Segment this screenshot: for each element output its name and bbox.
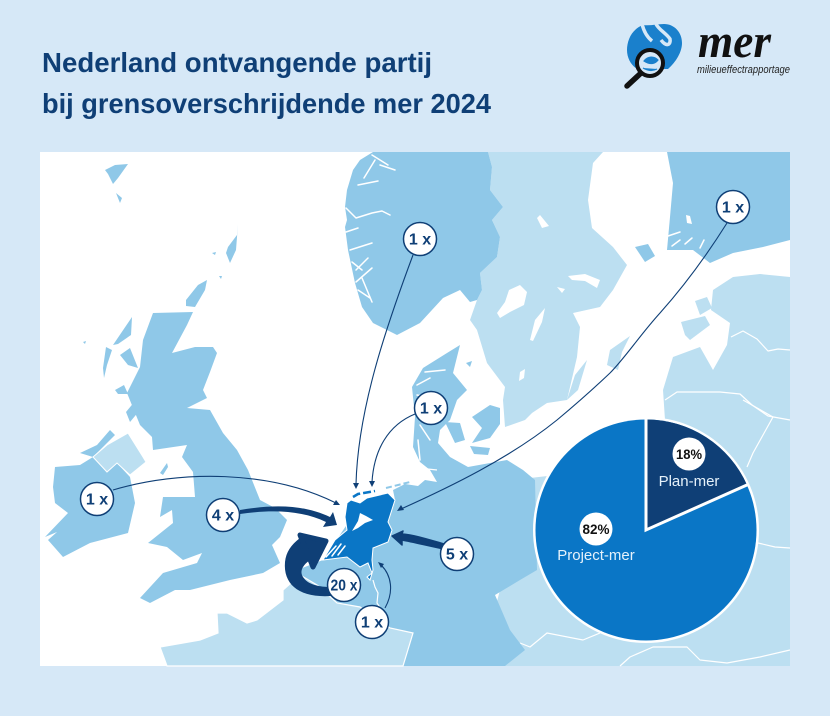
badge: France 1 x: 1 x: [361, 614, 383, 632]
map: Netherlands: [323, 482, 410, 580]
arrow: Belgium to Netherlands: [285, 535, 331, 596]
pie chart: plan-mer and project-mer share: [533, 417, 759, 643]
logo tagline: milieueffectrapportage: [697, 64, 790, 76]
map: Great Britain: [83, 164, 287, 603]
map: Germany, Belgium and Denmark: [297, 345, 537, 666]
badge: Ireland 1 x: 1 x: [86, 492, 108, 508]
arrow: Germany to Netherlands: [392, 531, 444, 549]
badge: Finland 1 x: 1 x: [722, 200, 744, 216]
map: Ireland: [45, 430, 146, 557]
badge: United Kingdom 4 x: 4 x: [212, 508, 234, 524]
label: Plan-mer: Plan-mer: [659, 473, 719, 490]
map: Norway: [345, 152, 503, 335]
badge: Denmark 1 x: 1 x: [420, 400, 442, 418]
badge: Germany 5 x: [440, 538, 474, 570]
arrow: Finland to Netherlands: [397, 223, 727, 511]
value: 18%: 18%: [676, 446, 703, 462]
title: [42, 47, 491, 119]
arrow: France to Netherlands: [378, 562, 391, 608]
map: France: [160, 575, 413, 666]
badge: Denmark 1 x: [414, 392, 448, 424]
badge: United Kingdom 4 x: [206, 498, 240, 532]
value: 82%: [580, 512, 612, 546]
map: Sweden: [470, 152, 630, 427]
label: Project-mer: Project-mer: [557, 547, 635, 564]
badge: Germany 5 x: 5 x: [446, 546, 468, 564]
logo wordmark: mer: [698, 15, 772, 68]
map: Finland: [635, 152, 790, 263]
map panel: [40, 152, 790, 666]
arrow: United Kingdom to Netherlands: [240, 506, 337, 527]
map: eastern Europe: [480, 274, 790, 666]
badge: Finland 1 x: [716, 190, 750, 224]
badge: Belgium 20 x: 20 x: [330, 578, 358, 594]
pie slice: plan-mer 18%: [646, 420, 747, 530]
title: bij grensoverschrijdende mer 2024: [42, 88, 491, 119]
badge: Ireland 1 x: [80, 482, 114, 516]
icon: globe with magnifying glass: [627, 24, 682, 86]
badge: Norway 1 x: [404, 222, 436, 256]
arrow: Denmark to Netherlands: [369, 414, 415, 487]
value: 82%: 82%: [582, 521, 610, 537]
arrow: Ireland to Netherlands: [113, 476, 340, 505]
title: Nederland ontvangende partij: [42, 47, 432, 78]
arrow: Norway to Netherlands: [353, 255, 413, 489]
value: 18%: [672, 438, 706, 470]
logo: mer milieueffectrapportage: [627, 15, 790, 86]
badge: Belgium 20 x: [328, 568, 360, 602]
badge: Norway 1 x: 1 x: [409, 232, 431, 248]
badge: France 1 x: [356, 606, 388, 638]
